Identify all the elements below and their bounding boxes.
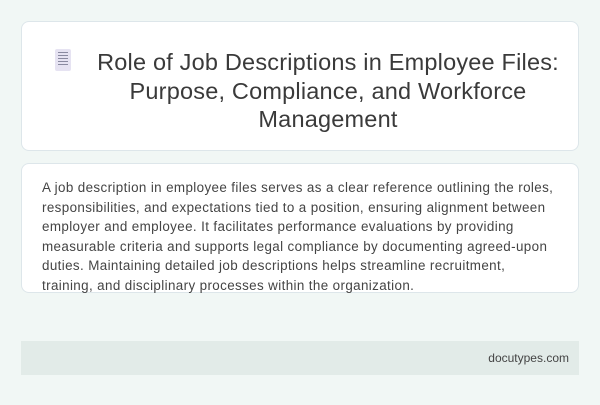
- panel: description: [21, 163, 579, 293]
- icon: document: [55, 49, 71, 71]
- footer text: docutypes.com: [488, 351, 569, 365]
- footer bar: [21, 341, 579, 375]
- panel: title: [21, 21, 579, 151]
- description text: training, and disciplinary processes within the organization.: [42, 278, 414, 293]
- description text: A job description in employee files serves as a clear reference outlining the roles, responsibilities, and expectations tied to a position, ensuring alignment between employer and employee. It facilitates performance evaluations by providing measurable criteria and supports legal compliance by documenting agreed-upon duties. Maintaining detailed job descriptions helps streamline recruitment,: [42, 180, 553, 273]
- title text: Role of Job Descriptions in Employee Files: Purpose, Compliance, and Workforce Management: [97, 49, 559, 132]
